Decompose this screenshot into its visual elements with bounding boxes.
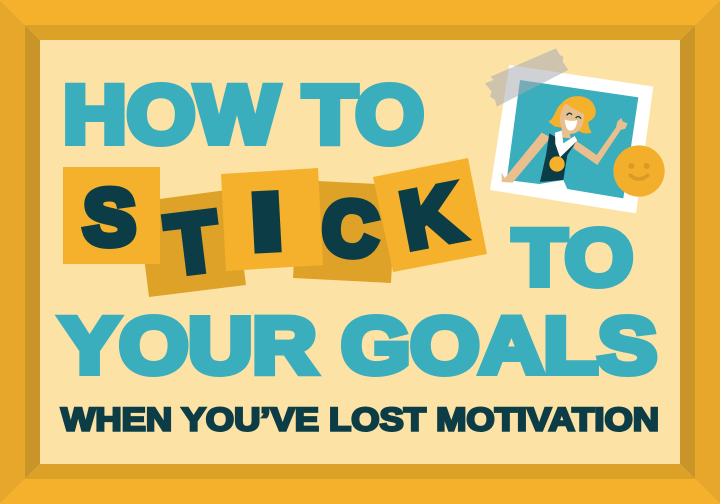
tile: S [63, 167, 160, 264]
title word: TO: TO [513, 214, 633, 302]
face [560, 103, 584, 138]
letter C: C [320, 185, 380, 273]
dress [540, 133, 577, 182]
tile: C [293, 180, 396, 283]
medal [549, 156, 565, 172]
arms [502, 133, 551, 183]
photo frame [490, 65, 653, 213]
tape [485, 48, 568, 107]
smiley mouth [630, 175, 648, 179]
eyes [567, 113, 581, 119]
photo background [507, 80, 638, 198]
tile: T [137, 189, 246, 297]
background panel [40, 40, 680, 464]
letter I: I [249, 178, 284, 267]
tile: K [373, 158, 487, 272]
photo illustration [485, 48, 653, 213]
title line: HOW TO: HOW TO [63, 70, 424, 160]
letter K: K [394, 167, 467, 265]
title line: YOUR GOALS: YOUR GOALS [60, 300, 657, 390]
figure: woman with medal [502, 96, 628, 183]
smiley eyes [628, 163, 634, 169]
tile: I [221, 168, 323, 271]
letter S: S [83, 173, 136, 261]
letter T: T [162, 195, 223, 292]
word STICK on tiles [63, 158, 487, 297]
smiley badge [613, 145, 665, 197]
smile [565, 119, 577, 131]
hair [548, 96, 596, 133]
medal ribbon [555, 131, 577, 157]
subtitle: WHEN YOU’VE LOST MOTIVATION [61, 402, 659, 438]
